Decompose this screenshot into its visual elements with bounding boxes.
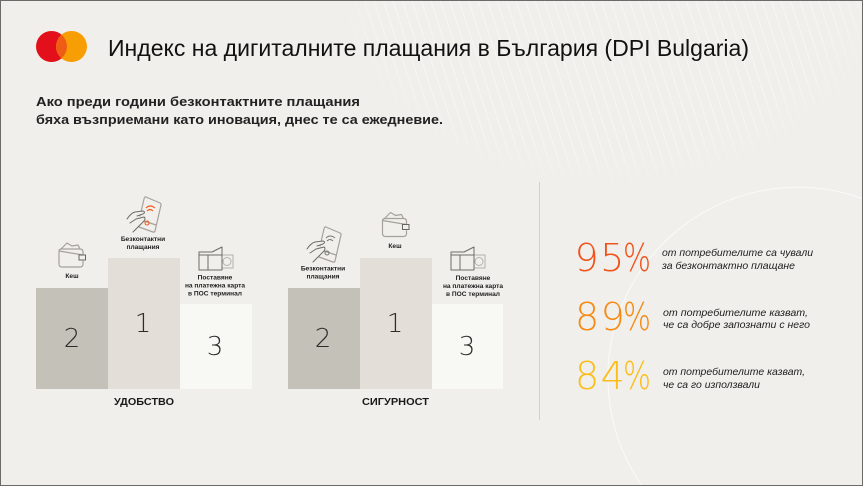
icon: POS terminal with card xyxy=(199,247,233,270)
bar: rank 3 card in POS xyxy=(180,304,252,389)
label: contactless payments xyxy=(121,236,165,251)
icon: Mastercard logo xyxy=(36,31,87,62)
label: cash: Кеш xyxy=(388,243,402,250)
intro text: бяха възприемани като иновация, днес те са ежедневие. xyxy=(36,112,443,127)
panel: security ranking xyxy=(288,212,503,408)
icon: wallet xyxy=(382,212,409,236)
bar: rank 2 cash xyxy=(36,288,108,389)
label: card in POS terminal xyxy=(185,274,245,298)
stat: 89% well acquainted: от потребителите казват, xyxy=(663,307,808,319)
striped background pattern xyxy=(384,1,838,154)
label: contactless payments: Безконтактни xyxy=(121,236,165,243)
stat: 84% have used it: % xyxy=(623,354,651,398)
stat: 84% have used it: от потребителите казват, xyxy=(663,366,805,378)
label: contactless payments: плащания xyxy=(126,244,160,251)
icon: POS terminal with card xyxy=(451,247,485,270)
bar: rank 1 cash: 1 xyxy=(387,309,403,339)
icon: contactless phone with hand xyxy=(127,197,161,232)
bar: rank 1 contactless xyxy=(108,258,180,389)
intro text: Ако преди години безконтактните плащания xyxy=(36,94,360,109)
stat: 89% well acquainted: 89 xyxy=(575,295,626,339)
label: card in POS terminal: в ПОС терминал xyxy=(188,290,242,298)
stat: 95% heard of contactless: 95 xyxy=(574,236,626,280)
icon: contactless phone with hand xyxy=(307,227,341,262)
stat: 95% heard of contactless: от потребителите са чували xyxy=(662,247,813,259)
stat: 89% well acquainted: % xyxy=(623,295,651,339)
stat: 84% have used it: 84 xyxy=(575,354,626,398)
stat: 95% heard of contactless xyxy=(574,236,813,280)
intro text xyxy=(36,94,443,127)
axis label: security: СИГУРНОСТ xyxy=(362,396,430,408)
label: card in POS terminal: Поставяне xyxy=(198,274,233,282)
label: card in POS terminal: в ПОС терминал xyxy=(446,291,500,298)
stat: 89% well acquainted xyxy=(575,295,810,339)
label: contactless payments: плащания xyxy=(306,274,340,280)
title: Индекс на дигиталните плащания в България (DPI Bulgaria) xyxy=(108,35,749,61)
stat: 84% have used it: че са го използвали xyxy=(663,379,760,391)
stat: 84% have used it xyxy=(575,354,805,398)
label: card in POS terminal: на платежна карта xyxy=(443,283,503,290)
panel: convenience ranking xyxy=(36,197,252,408)
bar: rank 2 contactless xyxy=(288,288,360,389)
stat: 95% heard of contactless: за безконтактно плащане xyxy=(661,260,795,272)
stat: 95% heard of contactless: % xyxy=(623,236,651,280)
bar: rank 1 contactless: 1 xyxy=(135,309,151,339)
label: contactless payments xyxy=(301,266,345,280)
label: cash: Кеш xyxy=(65,273,79,280)
stat: 89% well acquainted: че са добре запознати с него xyxy=(663,319,810,331)
bar: rank 2 contactless: 2 xyxy=(315,324,331,354)
bar: rank 3 card in POS: 3 xyxy=(207,332,223,362)
label: card in POS terminal xyxy=(443,275,503,298)
axis label: convenience: УДОБСТВО xyxy=(114,396,174,408)
vertical divider xyxy=(538,182,540,420)
label: card in POS terminal: на платежна карта xyxy=(185,282,245,290)
icon: wallet xyxy=(59,243,86,267)
bar: rank 1 cash xyxy=(360,258,432,389)
decorative circle outline xyxy=(608,187,862,485)
bar: rank 3 card in POS xyxy=(432,304,503,389)
bar: rank 3 card in POS: 3 xyxy=(459,332,475,362)
bar: rank 2 cash: 2 xyxy=(64,324,80,354)
label: contactless payments: Безконтактни xyxy=(301,266,345,272)
label: card in POS terminal: Поставяне xyxy=(456,275,491,282)
